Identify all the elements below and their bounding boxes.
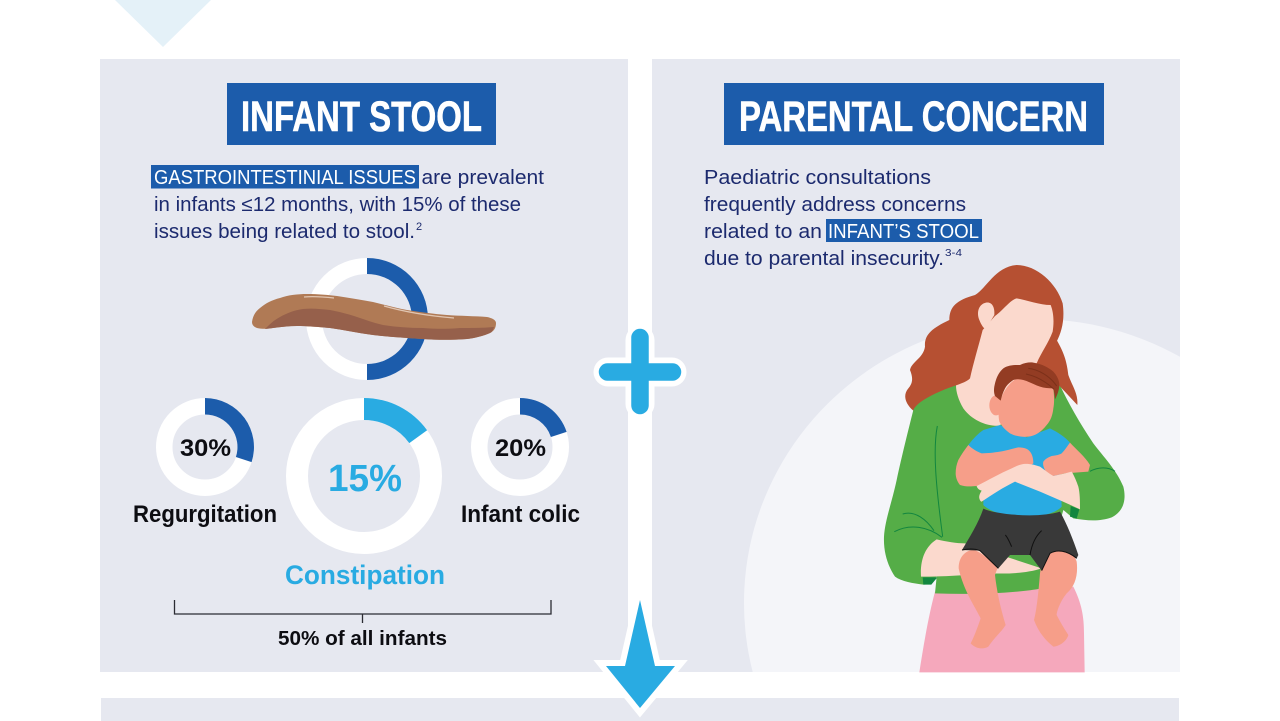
baby arm left: [956, 445, 1033, 486]
illustration: mother holding baby: [884, 265, 1125, 672]
text block: paediatric consultations: [704, 167, 982, 270]
heading: parental concern: PARENTAL CONCERN: [739, 93, 1088, 141]
top pointer triangle: [115, 0, 211, 47]
text block: gastrointestinial issues: in infants ≤12 months, with 15% of these: [154, 194, 521, 216]
text block: gastrointestinial issues: [151, 165, 544, 243]
text block: paediatric consultations: INFANT’S STOOL: [828, 221, 979, 243]
label: 20%: 20%: [495, 435, 546, 462]
text block: paediatric consultations: frequently address concerns: [704, 194, 966, 216]
mother hair right strand: [1037, 340, 1077, 405]
chart: infant colic 20% donut: [479, 398, 567, 488]
text block: paediatric consultations: related to an: [704, 221, 822, 243]
icon: stool: [252, 294, 496, 340]
mother hair: [905, 265, 1063, 411]
text block: paediatric consultations: Paediatric consultations: [704, 167, 931, 189]
label: constipation: Constipation: [285, 560, 445, 590]
mother left hand under baby: [921, 539, 1042, 577]
baby hair: [994, 362, 1059, 401]
baby head: [999, 377, 1054, 437]
baby hair strands: [1026, 368, 1057, 389]
label: 50% of all infants: 50% of all infants: [278, 628, 447, 650]
mother ear: [978, 303, 994, 329]
sleeve cuff shadow: [923, 506, 1079, 585]
text block: paediatric consultations: 3-4: [945, 248, 963, 259]
chart: half donut with stool: [252, 258, 496, 380]
baby leg left: [959, 549, 1006, 648]
label: 30%: 30%: [180, 435, 231, 462]
text block: gastrointestinial issues: issues being related to stool.: [154, 221, 415, 243]
bracket: [174, 600, 551, 623]
text block: paediatric consultations: due to parental insecurity.: [704, 248, 944, 270]
label: infant colic: Infant colic: [461, 501, 580, 528]
panel: parental concern: [652, 59, 1180, 672]
baby shirt: [968, 425, 1070, 517]
baby ear: [989, 395, 1003, 415]
panel: bottom strip: [101, 698, 1179, 721]
chart: constipation 15% donut: [297, 398, 431, 543]
text block: gastrointestinial issues: 2: [416, 221, 422, 233]
text block: gastrointestinial issues: are prevalent: [422, 167, 544, 189]
arrow: down: [606, 600, 675, 708]
text block: gastrointestinial issues: GASTROINTESTINIAL ISSUES: [154, 167, 416, 189]
mother forearm: [977, 464, 1080, 509]
panel: infant stool: [100, 59, 628, 672]
sweater fold lines: [894, 426, 1115, 537]
label: 15%: 15%: [328, 458, 402, 500]
shorts edge and folds: [962, 531, 1077, 571]
heading: parental concern: [724, 83, 1104, 145]
background circle: [744, 319, 1180, 672]
icon: plus: [608, 338, 672, 406]
label: regurgitation: Regurgitation: [133, 501, 277, 528]
chart: regurgitation 30% donut: [164, 398, 254, 488]
mother face and neck: [956, 298, 1053, 426]
mother sweater: [884, 382, 1125, 594]
baby arm right: [1043, 443, 1090, 476]
heading: infant stool: INFANT STOOL: [241, 93, 482, 141]
heading: infant stool: [227, 83, 496, 145]
mother skirt: [919, 587, 1085, 672]
baby shorts: [962, 509, 1078, 571]
baby leg right: [1034, 551, 1077, 647]
